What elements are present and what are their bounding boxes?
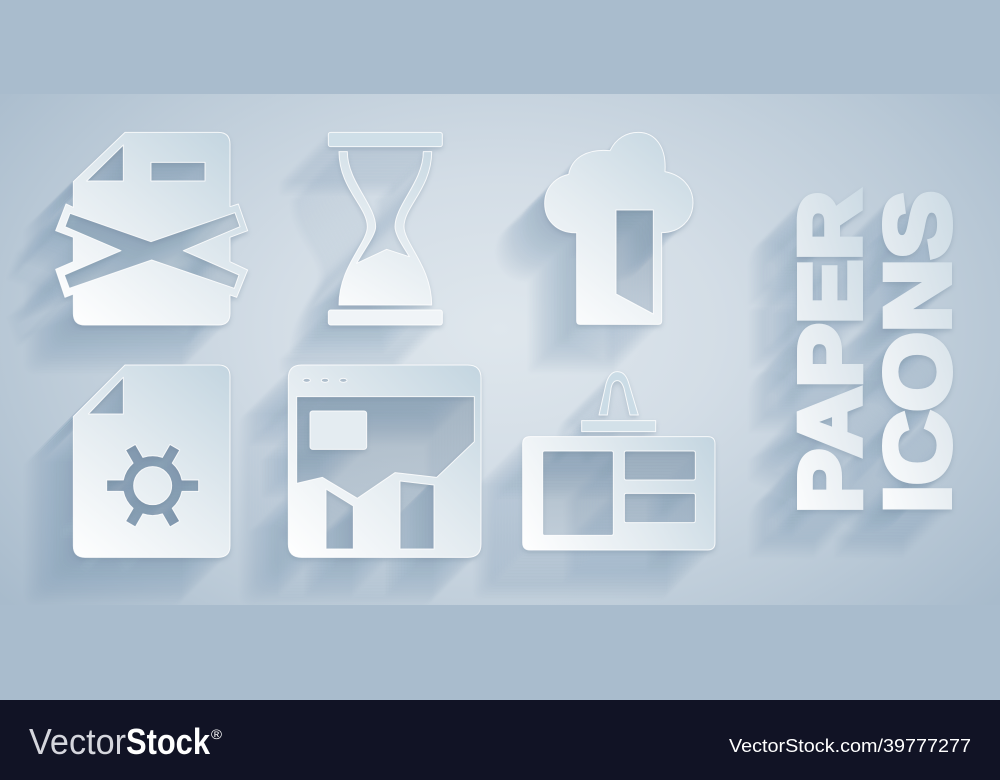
icon: file with crossed tape <box>56 132 248 325</box>
footer logo: VectorStock: ® <box>211 726 223 742</box>
footer logo: VectorStock: Stock <box>126 721 211 762</box>
cut-out hole shading behind the icons <box>64 145 695 549</box>
panel: light gradient background <box>0 94 1000 605</box>
icon: kitchen sink cabinet <box>523 372 715 550</box>
chart note card <box>310 411 367 449</box>
icon: chef hat <box>545 132 693 324</box>
icon: document with gear <box>73 365 230 557</box>
footer bar <box>0 700 1000 780</box>
footer reference id: VectorStock.com/39777277 <box>729 736 971 756</box>
title: PAPER: PAPER <box>782 191 879 513</box>
sink rim <box>582 421 656 432</box>
faucet <box>599 372 638 415</box>
hourglass body <box>339 152 432 305</box>
hourglass top bar <box>328 132 442 147</box>
cabinet <box>523 437 715 550</box>
icon: hourglass <box>328 132 442 325</box>
icon: browser window with chart <box>288 365 481 557</box>
footer logo: VectorStock <box>29 721 223 762</box>
hourglass bottom bar <box>328 310 442 325</box>
title: ICONS: ICONS <box>867 191 969 513</box>
footer logo: VectorStock: Vector <box>29 721 126 762</box>
paper icons group with long shadows <box>56 132 969 557</box>
